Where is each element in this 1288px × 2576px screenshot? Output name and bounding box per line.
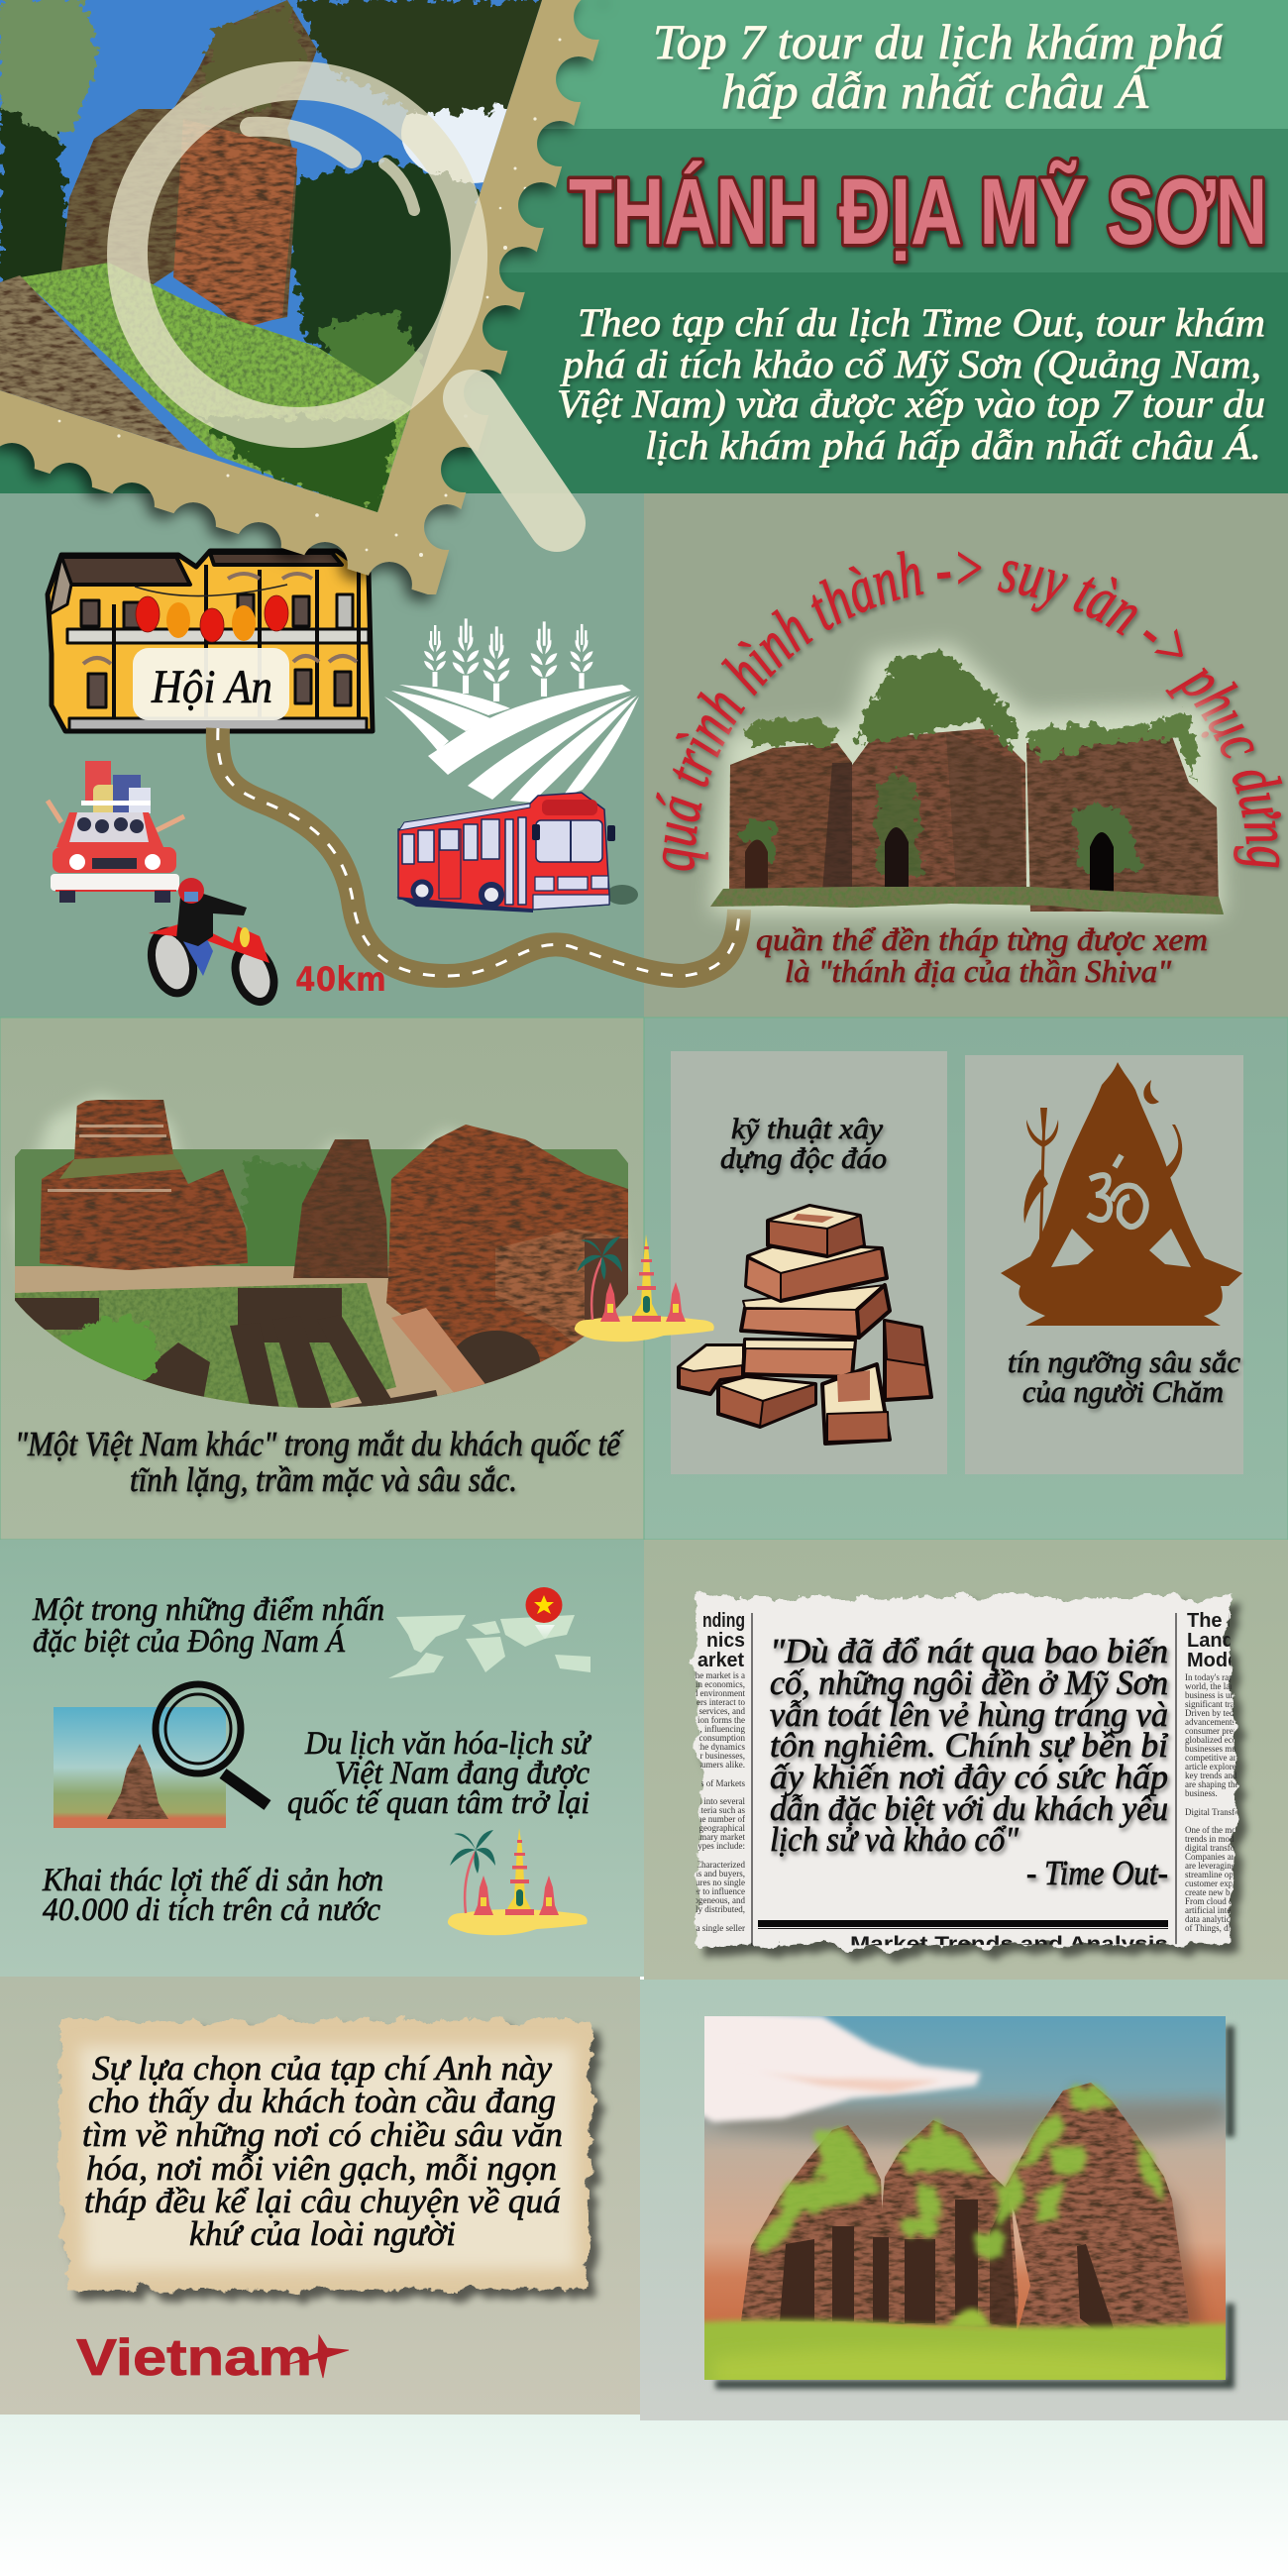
newspaper column right: Companies are	[1185, 1852, 1238, 1862]
label: Hoi An	[133, 648, 289, 720]
newspaper column right: Digital Transfo	[1185, 1807, 1239, 1817]
panel: cards background	[644, 1018, 1288, 1540]
quote text: "Dù đã đổ nát qua bao biến	[770, 1632, 1168, 1670]
quote text: ấy khiến nơi đây có sức hấp	[770, 1758, 1168, 1796]
newspaper column left: er to influence	[694, 1886, 745, 1896]
photo: temple ruins	[0, 1095, 644, 1427]
newspaper side headline right: Mode	[1187, 1650, 1238, 1671]
intro paragraph: phá di tích khảo cổ Mỹ Sơn (Quảng Nam,	[560, 342, 1261, 386]
note text: cho thấy du khách toàn cầu đang	[88, 2082, 556, 2120]
newspaper column left: ed environment	[690, 1688, 745, 1698]
illustration: small tower	[54, 1707, 226, 1828]
caption: Shiva sanctuary	[756, 921, 1208, 989]
newspaper column left: the market is a	[693, 1670, 745, 1680]
newspaper column right: From cloud c	[1185, 1896, 1233, 1906]
quote text: lịch sử và khảo cổ"	[770, 1820, 1019, 1859]
newspaper column right: of Things, dig	[1185, 1923, 1235, 1933]
road from Hoi An to My Son	[218, 728, 739, 976]
newspaper column left: the number of	[696, 1814, 745, 1824]
newspaper column left: es of Markets	[697, 1778, 745, 1788]
icon: Shiva silhouette with om	[1001, 1062, 1242, 1326]
note text	[82, 2049, 563, 2253]
newspaper column right: businesses must	[1185, 1744, 1242, 1754]
quote text: tôn nghiêm. Chính sự bền bỉ	[770, 1726, 1168, 1765]
title: top line	[653, 14, 1224, 119]
header band: intro	[0, 272, 1288, 493]
header band: main title	[0, 129, 1288, 272]
panel: route background	[0, 493, 644, 1018]
icon: world map with Vietnam pin	[388, 1587, 590, 1678]
icon: lanterns	[135, 585, 288, 642]
newspaper column right: streamline op	[1185, 1870, 1234, 1879]
page background	[0, 2415, 1288, 2576]
painting: three Cham towers	[694, 2009, 1234, 2389]
text: Southeast Asia highlight: đặc biệt của Đông Nam Á	[33, 1623, 346, 1660]
newspaper column right: are leveraging	[1185, 1861, 1236, 1871]
newspaper column left: d geographical	[693, 1823, 745, 1833]
newspaper column right: consumer prefere	[1185, 1726, 1247, 1736]
quote text: - Time Out-	[1026, 1854, 1168, 1892]
caption: another Vietnam: tĩnh lặng, trầm mặc và sâu sắc.	[130, 1460, 517, 1499]
newspaper column left: ns and buyers,	[694, 1869, 745, 1878]
intro paragraph: lịch khám phá hấp dẫn nhất châu Á.	[645, 423, 1261, 468]
newspaper column right: In today's rapidly	[1185, 1672, 1247, 1682]
newspaper column left	[696, 1672, 745, 1933]
temple photo: My Son towers	[710, 644, 1224, 914]
newspaper column left: tion forms the	[696, 1715, 745, 1725]
icon: palm and pagodas	[448, 1828, 588, 1935]
newspaper side headline right: Lands	[1187, 1630, 1245, 1652]
quote text: vẫn toát lên vẻ hùng tráng và	[770, 1695, 1168, 1734]
card text	[1008, 1344, 1240, 1409]
text: heritage advantage: Khai thác lợi thế di sản hơn	[42, 1863, 383, 1898]
newspaper column left: re, a single seller	[685, 1923, 745, 1933]
newspaper column left: ogeneous, and	[694, 1895, 745, 1905]
newspaper column right: One of the most	[1185, 1825, 1242, 1835]
newspaper column right: significant transf	[1185, 1699, 1245, 1709]
label: Hoi An: Hội An	[151, 661, 272, 713]
newspaper column right: article explores	[1185, 1762, 1240, 1771]
panel: paper note background	[0, 1977, 640, 2415]
icon: Hoi An yellow house	[48, 551, 373, 731]
newspaper column right: trends in modern	[1185, 1834, 1245, 1844]
note text: tháp đều kể lại câu chuyện về quá	[84, 2182, 561, 2220]
newspaper column left: ly distributed,	[696, 1904, 745, 1914]
newspaper column left: sumers alike.	[698, 1760, 745, 1770]
card text: kỹ thuật xây	[731, 1113, 884, 1145]
text: heritage advantage: 40.000 di tích trên cả nước	[43, 1892, 380, 1928]
text: Southeast Asia highlight	[32, 1592, 384, 1660]
text: cultural tourism: Việt Nam đang được	[335, 1756, 590, 1791]
note text: khứ của loài người	[189, 2214, 456, 2253]
newspaper side headline left: nics	[706, 1630, 745, 1652]
magnifier handle	[472, 398, 557, 523]
card: building technique	[671, 1051, 947, 1474]
label: 40km: 40km	[295, 960, 386, 1000]
note text: Sự lựa chọn của tạp chí Anh này	[92, 2049, 552, 2088]
postage stamp frame	[0, 0, 644, 624]
newspaper bottom headline: Market Trends and Analysis	[850, 1933, 1168, 1956]
caption: another Vietnam: "Một Việt Nam khác" trong mắt du khách quốc tế	[15, 1425, 624, 1463]
icon: palm and pagodas	[575, 1234, 714, 1342]
torn newspaper with quote	[685, 1597, 1247, 1957]
card: Cham belief	[965, 1055, 1243, 1474]
newspaper column right: business is under	[1185, 1690, 1246, 1700]
panel: photo and caption background	[0, 1018, 644, 1540]
title: top line: Top 7 tour du lịch khám phá	[653, 14, 1224, 69]
icon: red bus	[396, 793, 638, 912]
intro paragraph	[557, 300, 1265, 468]
newspaper side headline left	[698, 1612, 745, 1666]
newspaper column right: digital transform	[1185, 1843, 1244, 1853]
card text: tín ngưỡng sâu sắc	[1008, 1344, 1240, 1379]
text: cultural tourism	[287, 1726, 592, 1821]
panel: painting background	[640, 1980, 1288, 2420]
text: cultural tourism: Du lịch văn hóa-lịch sử	[304, 1726, 592, 1762]
icon: motorbike rider	[145, 878, 280, 1007]
note text: hóa, nơi mỗi viên gạch, mỗi ngọn	[86, 2149, 557, 2188]
newspaper column right: world, the landsc	[1185, 1681, 1246, 1691]
newspaper column left: ir businesses,	[698, 1751, 745, 1761]
newspaper column right: customer exp	[1185, 1878, 1234, 1888]
newspaper column left: primary market	[690, 1832, 745, 1842]
newspaper column right	[1185, 1674, 1237, 1933]
panel: temple background	[644, 493, 1288, 1018]
newspaper column left: consumption	[699, 1733, 745, 1743]
note text: tìm về những nơi có chiều sâu văn	[82, 2115, 563, 2154]
newspaper side headline left: arket	[698, 1650, 744, 1671]
card text: dựng độc đáo	[720, 1142, 887, 1175]
torn paper note	[57, 2021, 592, 2291]
photo: Champa tower inside stamp	[0, 0, 555, 525]
newspaper column right: business.	[1185, 1788, 1218, 1798]
newspaper column right: Driven by techno	[1185, 1708, 1247, 1718]
quote text	[770, 1632, 1168, 1892]
newspaper column left: riteria such as	[696, 1805, 745, 1815]
quote text: cố, những ngôi đền ở Mỹ Sơn	[770, 1664, 1168, 1702]
newspaper column left: ed into several	[694, 1796, 745, 1806]
card text	[720, 1113, 887, 1175]
newspaper column left: , services, and	[695, 1706, 745, 1716]
header band: top title	[0, 0, 1288, 129]
newspaper column right: competitive and	[1185, 1753, 1242, 1763]
newspaper column right: key trends and	[1185, 1771, 1237, 1780]
icon: black magnifier	[156, 1684, 268, 1805]
magnifier over photo	[107, 61, 557, 523]
magnifier glare	[250, 127, 352, 159]
icon: pile of bricks	[679, 1206, 931, 1444]
caption: another Vietnam	[15, 1425, 624, 1499]
newspaper column left: the dynamics	[698, 1742, 745, 1752]
newspaper column left: , influencing	[699, 1724, 745, 1734]
logo: Vietnam+: Vietnam	[76, 2329, 312, 2387]
newspaper column right: artificial intell	[1185, 1905, 1236, 1915]
newspaper column right: globalized econo	[1185, 1735, 1246, 1745]
curved heading: formation decline restoration: quá trình hình thành -> suy tàn -> phục dưng	[656, 551, 1286, 876]
icon: car with luggage and tourists	[48, 761, 184, 903]
newspaper column left: st in economics,	[688, 1679, 745, 1689]
newspaper side headline left: nding	[702, 1610, 745, 1632]
newspaper side headline right: The B	[1187, 1610, 1242, 1632]
newspaper column right: data analytic	[1185, 1914, 1231, 1924]
intro paragraph: Việt Nam) vừa được xếp vào top 7 tour du	[557, 381, 1265, 426]
newspaper column left: llers interact to	[692, 1697, 745, 1707]
title: top line: hấp dẫn nhất châu Á	[721, 63, 1148, 119]
newspaper column right: advancements, s	[1185, 1717, 1243, 1727]
newspaper column left: types include:	[696, 1841, 745, 1851]
newspaper column right: create new b	[1185, 1887, 1231, 1897]
text: Southeast Asia highlight: Một trong những điểm nhấn	[32, 1592, 384, 1628]
newspaper column left: tures no single	[694, 1878, 745, 1887]
text: heritage advantage	[42, 1863, 383, 1928]
newspaper side headline right	[1187, 1612, 1231, 1666]
newspaper column left: Characterized	[696, 1860, 745, 1870]
card text: của người Chăm	[1022, 1374, 1224, 1409]
panel: quote background	[644, 1540, 1288, 1980]
caption: Shiva sanctuary: quần thể đền tháp từng được xem	[756, 921, 1208, 957]
newspaper column right: are shaping the l	[1185, 1779, 1244, 1789]
intro paragraph: Theo tạp chí du lịch Time Out, tour khám	[578, 300, 1265, 345]
panel: highlights background	[0, 1540, 644, 1977]
text: cultural tourism: quốc tế quan tâm trở lại	[287, 1785, 590, 1821]
caption: Shiva sanctuary: là "thánh địa của thần Shiva"	[785, 953, 1172, 989]
quote text: dẫn đặc biệt với du khách yêu	[770, 1789, 1168, 1828]
icon: rice field	[384, 618, 639, 803]
